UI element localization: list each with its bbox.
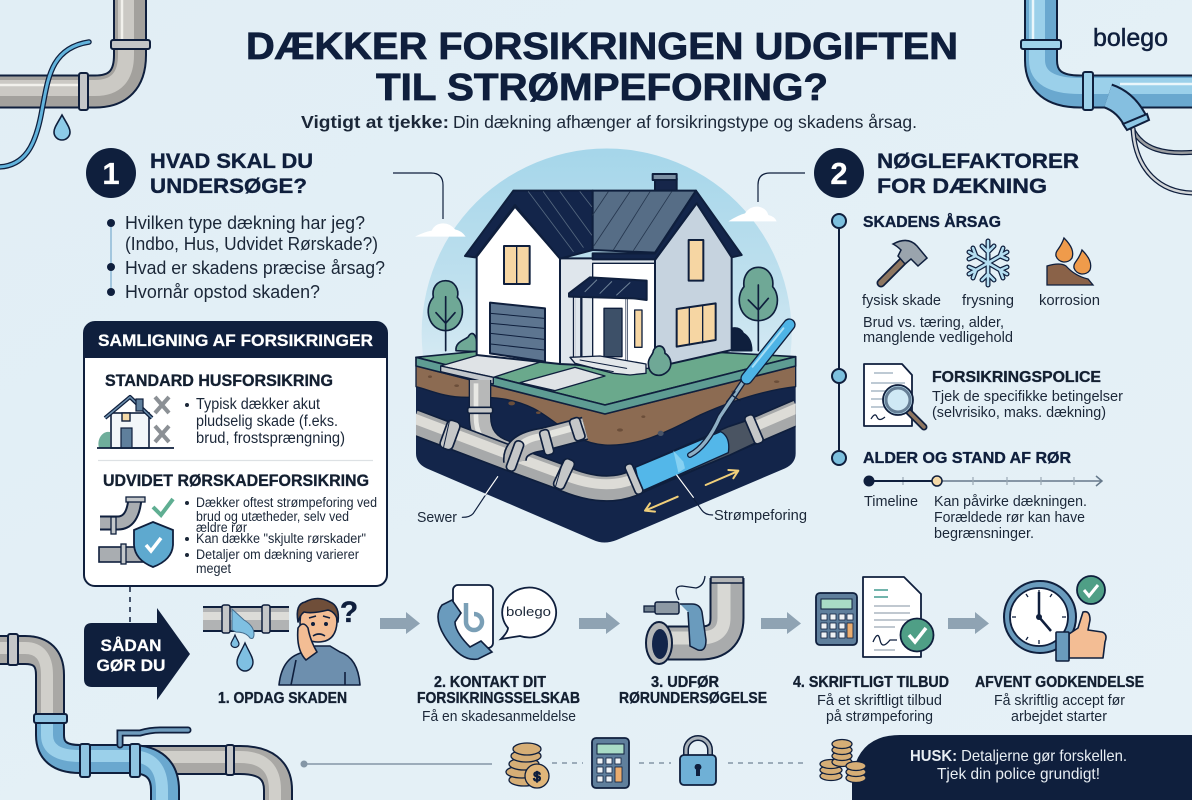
section 1 heading: HVAD SKAL DU (150, 150, 313, 173)
icon: coins: $ (533, 769, 541, 784)
step label: RØRUNDERSØGELSE (619, 690, 767, 707)
factor: pipe age (863, 450, 1102, 542)
section 2 heading (814, 148, 1079, 198)
step label: 3. UDFØR (651, 674, 719, 691)
arrow: step 2 to 3 (579, 612, 620, 634)
age timeline (864, 476, 1102, 486)
section 1 questions: (Indbo, Hus, Udvidet Rørskade?) (125, 234, 378, 254)
factor: insurance policy: FORSIKRINGSPOLICE (932, 369, 1101, 386)
pipe: top right (1021, 0, 1192, 193)
section 1 questions: Hvornår opstod skaden? (125, 282, 320, 302)
title (246, 26, 958, 109)
leader lines (462, 475, 713, 517)
step label: arbejdet starter (1011, 708, 1107, 725)
extended insurance text: Kan dække "skjulte rørskader" (196, 531, 366, 546)
factor: insurance policy: (selvrisiko, maks. dækning) (932, 404, 1106, 421)
extended insurance heading: UDVIDET RØRSKADEFORSIKRING (103, 471, 369, 490)
step label: AFVENT GODKENDELSE (975, 674, 1144, 691)
factor timeline (832, 214, 846, 465)
extended insurance text: Detaljer om dækning varierer (196, 547, 359, 562)
callout: reminder (852, 735, 1192, 800)
callout: reminder: Tjek din police grundigt! (937, 766, 1100, 783)
extended insurance text: Dækker oftest strømpeforing ved (196, 495, 377, 510)
house illustration (413, 149, 798, 542)
icon: clock (1004, 581, 1076, 653)
standard insurance heading: STANDARD HUSFORSIKRING (105, 371, 333, 390)
icon: hammer (881, 240, 927, 283)
soil (416, 366, 796, 445)
step label: Få skriftlig accept før (994, 692, 1125, 709)
bottom cost strip (300, 738, 866, 788)
icon: thumbs up (1056, 612, 1106, 661)
section 1 questions (107, 213, 385, 302)
arrow: how-to banner (84, 608, 190, 700)
extended insurance text: ældre rør (196, 520, 247, 535)
icon: house with crosses (97, 397, 174, 448)
extended insurance text (185, 495, 377, 576)
icon: document with magnifier (864, 364, 924, 427)
factor: damage cause (862, 214, 1100, 346)
factor: pipe age: Forældede rør kan have (934, 509, 1085, 526)
step label: 2. KONTAKT DIT (434, 674, 546, 691)
icon: coin stacks (820, 740, 866, 782)
label: liner: Strømpeforing (714, 507, 807, 524)
section 1 questions: Hvilken type dækning har jeg? (125, 213, 365, 233)
question mark: ? (340, 596, 358, 629)
step label (975, 674, 1144, 725)
icon: pipes and shield (99, 497, 173, 567)
driveway (441, 353, 542, 377)
factor: insurance policy: Tjek de specifikke betingelser (932, 388, 1123, 405)
icon: coins (506, 743, 549, 788)
title: DÆKKER FORSIKRINGEN UDGIFTEN (246, 26, 958, 68)
arrow: how-to banner: SÅDAN (100, 636, 162, 655)
step label: Få et skriftligt tilbud (817, 692, 942, 709)
title: TIL STRØMPEFORING? (376, 67, 828, 109)
arrow: how-to banner: GØR DU (96, 656, 166, 675)
direction arrows (645, 470, 738, 512)
factor: damage cause: frysning (962, 292, 1014, 309)
label: sewer: Sewer (417, 509, 457, 526)
step 2: contact insurer (417, 585, 580, 725)
step 1: discover damage (203, 596, 360, 707)
liner (635, 418, 758, 492)
house walls (465, 174, 742, 375)
icon: calculator (592, 738, 629, 788)
chimney (655, 178, 677, 192)
connector lines (393, 173, 805, 219)
factor: pipe age: Kan påvirke dækningen. (934, 493, 1087, 510)
pipe: top left (0, 0, 150, 167)
factor: damage cause: manglende vedligehold (863, 329, 1013, 346)
windows (504, 246, 530, 284)
arrow: step 1 to 2 (380, 612, 420, 634)
step label (417, 674, 580, 725)
step label: 1. OPDAG SKADEN (218, 690, 347, 707)
icon: corrosion flames (1047, 238, 1093, 285)
arrow: step 3 to 4 (761, 612, 801, 634)
icon: worried man (279, 598, 360, 685)
shrub (648, 346, 671, 375)
factor: pipe age: Timeline (864, 493, 918, 510)
standard insurance text (185, 396, 345, 447)
sky (422, 149, 792, 373)
pipe: bottom left (0, 634, 278, 800)
soil block base (416, 360, 796, 542)
step label: 4. SKRIFTLIGT TILBUD (793, 674, 949, 691)
coupling rings (624, 414, 764, 495)
trees (428, 267, 777, 352)
step label: FORSIKRINGSSELSKAB (417, 690, 580, 707)
lawn (416, 347, 796, 405)
standard insurance text: brud, frostsprængning) (196, 430, 345, 447)
section 2 heading: NØGLEFAKTORER (877, 150, 1079, 173)
extended insurance text: meget (196, 561, 231, 576)
step label: Få en skadesanmeldelse (422, 708, 576, 725)
step label (793, 674, 949, 725)
step label: på strømpeforing (826, 708, 933, 725)
factor: damage cause: fysisk skade (862, 292, 941, 309)
factor: pipe age: begrænsninger. (934, 525, 1034, 542)
roof (465, 191, 593, 259)
standard insurance text: pludselig skade (f.eks. (196, 413, 338, 430)
icon: check bubble (1077, 576, 1105, 604)
standard insurance text: Typisk dækker akut (196, 396, 321, 413)
factor: damage cause: Brud vs. tæring, alder, (863, 314, 1004, 331)
icon: padlock (680, 738, 716, 785)
section 1 questions: Hvad er skadens præcise årsag? (125, 258, 385, 278)
liner tool (690, 325, 789, 455)
pipe couplings (439, 407, 586, 491)
icon: calculator (816, 593, 857, 645)
arrow: step 4 to 5 (948, 612, 989, 634)
panel: comparison (84, 322, 387, 586)
icon: phone with logo: bolego (506, 604, 551, 619)
step 4: written quote (793, 577, 949, 725)
icon: phone with logo (438, 585, 556, 659)
clouds (415, 207, 777, 237)
icon: signed document (863, 577, 934, 657)
sewer pipes (413, 380, 798, 488)
garage (490, 303, 545, 362)
factor: insurance policy (864, 364, 1123, 427)
extended insurance text: brud og utætheder, selv ved (196, 509, 349, 524)
section 1 heading (86, 148, 313, 198)
factor: damage cause: SKADENS ÅRSAG (863, 214, 1001, 231)
callout: reminder: HUSK: Detaljerne gør forskellen. (910, 748, 1127, 765)
section 2 heading: FOR DÆKNING (877, 175, 1047, 198)
section 1 heading: 1 (102, 156, 120, 191)
subtitle: Vigtigt at tjekke: (301, 112, 449, 132)
factor: pipe age: ALDER OG STAND AF RØR (863, 450, 1071, 467)
panel heading: SAMLIGNING AF FORSIKRINGER (98, 331, 373, 350)
section 2 heading: 2 (830, 156, 848, 191)
section 1 heading: UNDERSØGE? (150, 175, 307, 198)
subtitle: Din dækning afhænger af forsikringstype og skadens årsag. (453, 112, 917, 132)
icon: leaking pipe (203, 605, 289, 671)
step 3: pipe inspection (619, 576, 767, 707)
factor: damage cause: korrosion (1039, 292, 1100, 309)
step label (619, 674, 767, 707)
logo: bolego (1093, 24, 1168, 52)
porch (604, 308, 622, 357)
icon: snowflake (969, 241, 1007, 285)
icon: pipe with camera (644, 576, 743, 664)
step 5: await approval (975, 576, 1144, 725)
